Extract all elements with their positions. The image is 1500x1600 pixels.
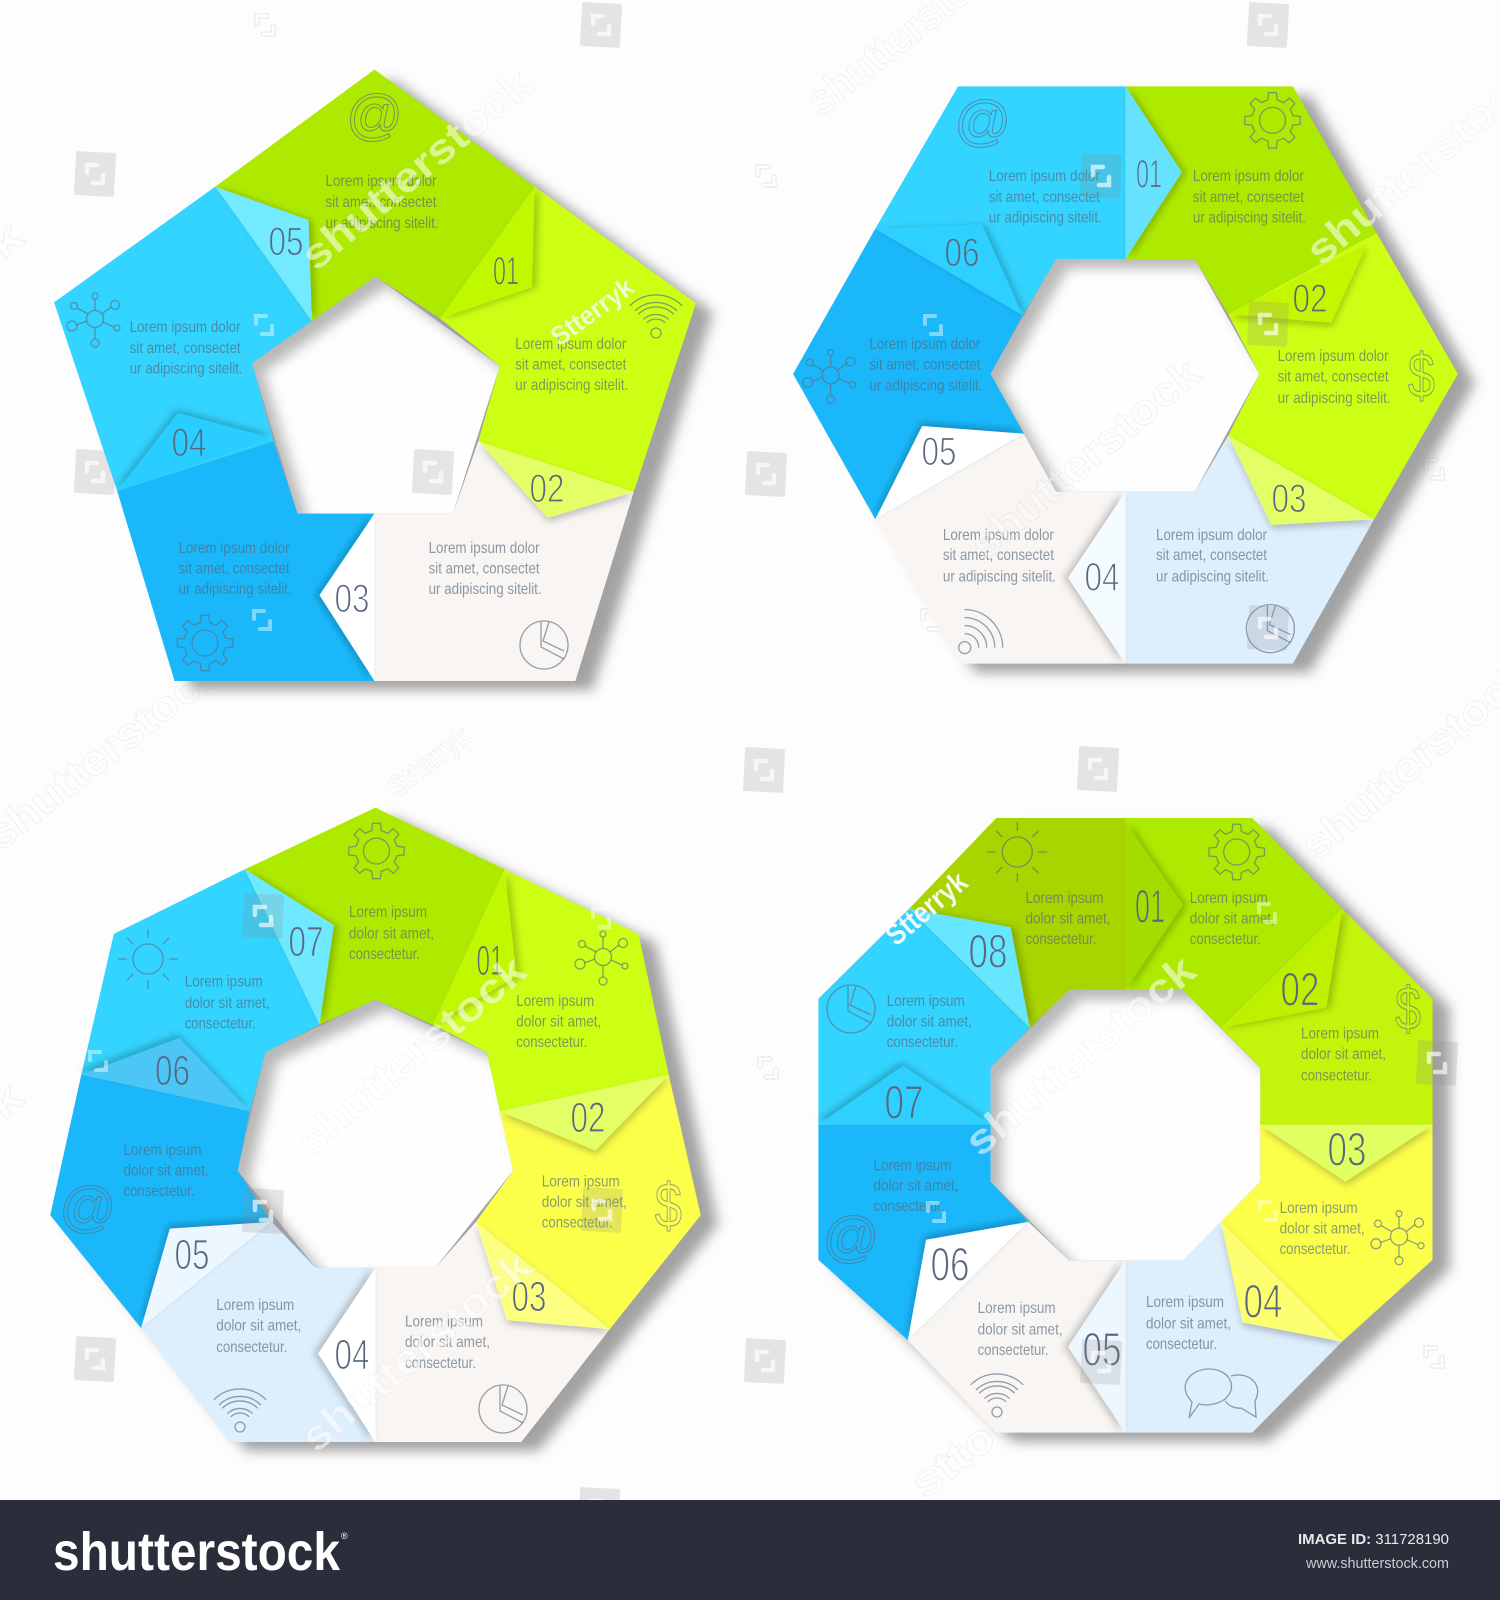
text: segment 06: consectetur. <box>874 1198 944 1215</box>
segment 04 <box>375 1222 610 1442</box>
watermarks on heptagon: shutterstock <box>287 945 536 1165</box>
icon: pie chart <box>520 621 568 669</box>
icon: hub <box>803 350 856 404</box>
numbers: 05 <box>1082 1322 1122 1376</box>
hole inner shadow <box>990 990 1260 1260</box>
numbers: 02 <box>530 467 564 511</box>
fold 03 <box>320 514 375 681</box>
segment 01 <box>1125 818 1342 1028</box>
fold 07 <box>245 869 334 1025</box>
numbers: 06 <box>930 1238 970 1290</box>
text: segment 05: consectetur. <box>978 1342 1049 1359</box>
numbers: 01 <box>1136 152 1162 196</box>
icon: rss <box>959 610 1003 654</box>
numbers: 03 <box>512 1273 546 1321</box>
text: segment 01: consectetur. <box>349 946 420 963</box>
fold 01 <box>433 872 517 1025</box>
text: segment 07 <box>887 993 972 1051</box>
text: segment 01 <box>1190 890 1275 948</box>
icon: gear <box>177 615 233 671</box>
text: segment 05: dolor sit amet, <box>216 1318 301 1334</box>
chart: pentagon with five segments <box>54 70 719 698</box>
text: segment 01: ur adipiscing sitelit. <box>326 215 438 232</box>
fold 03 <box>1228 436 1374 525</box>
registered mark: ® <box>341 1531 348 1541</box>
text: segment 04: sit amet, consectet <box>179 560 290 578</box>
segment 05 <box>54 187 312 491</box>
hole inner shadow <box>990 259 1259 492</box>
hexagon geometry <box>793 86 1458 664</box>
icon: gear <box>1245 93 1300 148</box>
text: segment 08: consectetur. <box>1026 931 1096 948</box>
text: segment 04: Lorem ipsum dolor <box>943 527 1054 544</box>
icon: dollar: $ <box>1408 342 1435 411</box>
text: segment 01: ur adipiscing sitelit. <box>1193 210 1306 226</box>
fold 03 <box>1260 1125 1433 1182</box>
icon: at sign: @ <box>59 1175 116 1238</box>
fold 02 <box>1221 909 1342 1028</box>
text: segment 06: ur adipiscing sitelit. <box>989 210 1102 226</box>
icon: pie chart <box>479 1385 527 1433</box>
segment 05 <box>793 229 1024 519</box>
segment 07 <box>81 869 320 1111</box>
octagon drop shadow <box>835 827 1450 1442</box>
text: segment 02 <box>1301 1026 1386 1084</box>
segment 06 <box>50 1075 272 1328</box>
text: segment 02 <box>1278 348 1391 407</box>
numbers: 08 <box>968 924 1008 978</box>
fold 01 <box>1125 86 1182 259</box>
fold 03 <box>476 1222 610 1329</box>
segment 05 <box>908 1222 1125 1433</box>
text: segment 01: Lorem ipsum <box>349 904 427 921</box>
segment 03 <box>476 1075 701 1329</box>
text: segment 01 <box>326 173 438 232</box>
fold 01 <box>1125 822 1183 990</box>
text: segment 02: Lorem ipsum <box>1301 1026 1379 1042</box>
numbers: 03 <box>334 577 370 621</box>
text: segment 04: Lorem ipsum <box>405 1314 483 1330</box>
numbers: 04 <box>334 1331 370 1379</box>
icon: hub <box>1371 1211 1424 1265</box>
footer band <box>0 1500 1500 1600</box>
text: segment 03: consectetur. <box>1280 1241 1351 1258</box>
text: segment 04: dolor sit amet, <box>405 1334 490 1351</box>
text: segment 03: Lorem ipsum dolor <box>1156 527 1268 544</box>
text: segment 03 <box>1156 527 1269 586</box>
text: segment 03: sit amet, consectet <box>429 560 540 578</box>
watermarks on hexagon: shutterstock <box>961 348 1210 568</box>
pentagon geometry <box>54 70 696 681</box>
segment 03 <box>1221 1125 1433 1342</box>
text: segment 06: sit amet, consectet <box>989 189 1100 206</box>
watermarks on pentagon: Stterryk <box>545 271 640 352</box>
text: segment 02: sit amet, consectet <box>1278 368 1389 386</box>
image id: IMAGE ID: 311728190 <box>1298 1531 1449 1548</box>
text: segment 03 <box>429 540 542 598</box>
segment 02 <box>440 187 696 492</box>
hole inner shadow <box>238 1000 490 1268</box>
segment 03 <box>1125 436 1374 664</box>
text: segment 05 <box>130 319 243 378</box>
text: segment 06: consectetur. <box>124 1183 194 1200</box>
segment 02 <box>1228 233 1458 519</box>
icon: at sign: @ <box>823 1205 879 1268</box>
fold 02 <box>478 441 634 518</box>
background watermarks: sttock <box>902 1377 1049 1507</box>
hexagon drop shadow <box>810 95 1475 673</box>
chart: octagon with eight segments <box>818 818 1458 1450</box>
text: segment 05: Lorem ipsum dolor <box>869 336 981 353</box>
segment 05 <box>141 1222 375 1442</box>
text: segment 02: sit amet, consectet <box>515 356 627 374</box>
fold 05 <box>875 426 1024 519</box>
icon: wifi <box>214 1389 266 1432</box>
text: segment 05 <box>978 1300 1063 1359</box>
numbers: 06 <box>155 1047 190 1095</box>
text: segment 05: ur adipiscing sitelit. <box>130 360 243 378</box>
text: segment 03: sit amet, consectet <box>1156 547 1267 564</box>
icon: gear <box>1209 824 1264 880</box>
numbers: 02 <box>1280 962 1320 1016</box>
text: segment 02 <box>516 993 601 1051</box>
text: segment 03: consectetur. <box>542 1214 613 1232</box>
text: segment 02: Lorem ipsum dolor <box>1278 348 1389 365</box>
chart: hexagon with six segments <box>793 86 1500 680</box>
text: segment 01: dolor sit amet, <box>349 926 434 942</box>
text: segment 04 <box>179 540 292 598</box>
text: segment 06: Lorem ipsum dolor <box>989 168 1100 185</box>
text: segment 07: consectetur. <box>185 1016 256 1032</box>
segment 02 <box>1221 909 1433 1125</box>
fold 04 <box>117 413 272 491</box>
text: segment 03: Lorem ipsum <box>1280 1200 1358 1217</box>
numbers: 02 <box>570 1094 606 1142</box>
numbers: 01 <box>1135 880 1165 932</box>
text: segment 02: Lorem ipsum dolor <box>515 336 627 353</box>
heptagon drop shadow <box>67 817 718 1451</box>
text: segment 04: consectetur. <box>1146 1336 1217 1353</box>
fold 05 <box>141 1222 272 1328</box>
text: segment 03 <box>542 1174 627 1232</box>
fold 04 <box>1221 1222 1342 1342</box>
numbers: 07 <box>884 1076 924 1128</box>
site url: www.shutterstock.com <box>1305 1555 1449 1572</box>
numbers: 01 <box>493 250 519 294</box>
segment 02 <box>433 869 669 1111</box>
text: segment 01 <box>1193 168 1306 226</box>
text: segment 01: dolor sit amet, <box>1190 910 1275 928</box>
numbers: 03 <box>1272 477 1306 521</box>
fold 06 <box>875 224 1023 315</box>
text: segment 02: ur adipiscing sitelit. <box>515 377 628 394</box>
text: segment 02 <box>515 336 628 394</box>
text: segment 07: consectetur. <box>887 1034 958 1051</box>
watermarks on octagon <box>879 865 1458 1385</box>
text: segment 02: consectetur. <box>516 1034 587 1051</box>
segment 08 <box>909 818 1125 1028</box>
text: segment 04: Lorem ipsum <box>1146 1294 1224 1311</box>
fold 08 <box>909 909 1030 1028</box>
text: segment 03: dolor sit amet, <box>542 1194 627 1211</box>
text: segment 07: Lorem ipsum <box>185 974 263 990</box>
text: segment 05: sit amet, consectet <box>869 356 981 374</box>
center hole <box>991 259 1259 492</box>
watermarks on pentagon <box>254 59 640 629</box>
segment 04 <box>875 434 1125 664</box>
text: segment 04 <box>405 1314 490 1372</box>
text: segment 08: dolor sit amet, <box>1026 910 1110 928</box>
icon: hub <box>67 293 120 347</box>
text: segment 06 <box>124 1142 208 1200</box>
icon: sun <box>987 822 1047 882</box>
text: segment 06 <box>989 168 1102 226</box>
icon: pie chart <box>827 985 875 1033</box>
text: segment 03 <box>1280 1200 1365 1258</box>
segment 04 <box>1125 1222 1342 1433</box>
numbers: 05 <box>268 220 304 264</box>
numbers <box>922 152 1328 600</box>
text: segment 06: Lorem ipsum <box>874 1158 952 1174</box>
text: segment 07: dolor sit amet, <box>887 1014 972 1030</box>
segment 06 <box>818 1125 1028 1340</box>
text: segment 05: Lorem ipsum <box>978 1300 1056 1317</box>
text: segment 02: dolor sit amet, <box>1301 1046 1386 1063</box>
text: segment 01: Lorem ipsum <box>1190 890 1268 907</box>
fold 04 <box>318 1268 375 1442</box>
watermarks on pentagon: shutterstock <box>292 59 541 279</box>
numbers <box>172 220 564 621</box>
text: segment 01: sit amet, consectet <box>1193 189 1304 206</box>
watermarks on hexagon <box>925 54 1500 651</box>
center hole <box>991 990 1260 1261</box>
numbers <box>155 918 606 1379</box>
text: segment 05: sit amet, consectet <box>130 340 241 357</box>
text: segment 03: ur adipiscing sitelit. <box>429 581 542 598</box>
segment 01 <box>215 69 535 321</box>
icon: hub <box>575 931 628 985</box>
text: segment 04: sit amet, consectet <box>943 547 1054 564</box>
icon: gear <box>349 823 404 879</box>
text: segment 06: Lorem ipsum <box>124 1142 202 1159</box>
text: segment 07: dolor sit amet, <box>185 995 270 1012</box>
segment 01 <box>245 808 505 1025</box>
icon: dollar: $ <box>1395 975 1421 1042</box>
text: segment 05 <box>869 336 982 394</box>
center hole <box>238 1000 513 1268</box>
chart: heptagon with seven segments <box>50 808 724 1458</box>
watermarks on heptagon: shutterstock <box>292 1241 541 1461</box>
center hole <box>252 276 500 514</box>
fold 01 <box>440 187 535 318</box>
fold 05 <box>215 187 312 321</box>
segment 01 <box>1125 86 1377 314</box>
text: segment 04: Lorem ipsum dolor <box>179 540 290 557</box>
footer logo: shutterstock <box>53 1522 341 1582</box>
text: segment 04: consectetur. <box>405 1355 476 1372</box>
text: segment 07: Lorem ipsum <box>887 993 965 1010</box>
icon: at sign: @ <box>954 89 1011 152</box>
icon: wifi <box>971 1374 1023 1417</box>
numbers: 04 <box>1084 556 1120 600</box>
text: segment 05: dolor sit amet, <box>978 1322 1063 1338</box>
text: segment 06: dolor sit amet, <box>874 1178 958 1194</box>
numbers: 06 <box>944 231 980 275</box>
icon: pie chart <box>1246 605 1294 653</box>
fold 06 <box>81 1038 250 1111</box>
segment 06 <box>875 86 1125 315</box>
text: segment 05: Lorem ipsum dolor <box>130 319 241 336</box>
icon: sun <box>118 929 178 989</box>
numbers: 04 <box>172 421 206 465</box>
numbers: 05 <box>922 430 956 474</box>
text: segment 04: dolor sit amet, <box>1146 1316 1231 1332</box>
numbers: 02 <box>1292 277 1328 321</box>
text: segment 02: consectetur. <box>1301 1068 1372 1084</box>
fold 05 <box>1068 1261 1125 1433</box>
icon: chat bubbles <box>1185 1369 1258 1418</box>
fold 07 <box>818 1066 991 1125</box>
fold 06 <box>908 1222 1028 1340</box>
text: segment 04: ur adipiscing sitelit. <box>179 581 292 598</box>
text: segment 03: Lorem ipsum dolor <box>429 540 540 557</box>
numbers: 04 <box>1244 1274 1282 1328</box>
text: segment 08: Lorem ipsum <box>1026 890 1104 907</box>
numbers: 03 <box>1328 1122 1366 1176</box>
text: segment 05: Lorem ipsum <box>216 1297 294 1314</box>
numbers <box>884 880 1366 1376</box>
text: segment 04: ur adipiscing sitelit. <box>943 568 1056 586</box>
text: segment 03: ur adipiscing sitelit. <box>1156 568 1269 586</box>
text: segment 08 <box>1026 890 1110 948</box>
watermarks on heptagon <box>90 893 623 1461</box>
text: segment 03: dolor sit amet, <box>1280 1220 1365 1238</box>
text: segment 02: dolor sit amet, <box>516 1014 601 1030</box>
icon: wifi <box>630 295 682 338</box>
numbers: 07 <box>288 918 324 966</box>
fold 02 <box>500 1075 669 1151</box>
hole inner shadow <box>252 276 500 514</box>
fold 04 <box>1068 492 1125 664</box>
text: segment 06 <box>874 1158 958 1215</box>
segment 04 <box>117 441 375 681</box>
text: segment 07 <box>185 974 270 1032</box>
segment 07 <box>818 909 1030 1125</box>
text: segment 03: Lorem ipsum <box>542 1174 620 1190</box>
text: segment 05 <box>216 1297 301 1356</box>
octagon geometry <box>818 818 1433 1433</box>
text: segment 01 <box>349 904 434 963</box>
text: segment 04 <box>943 527 1056 586</box>
text: segment 02: ur adipiscing sitelit. <box>1278 390 1391 407</box>
watermarks on octagon: Stterryk <box>879 865 974 952</box>
text: segment 05: consectetur. <box>216 1339 287 1356</box>
watermarks on octagon: shutterstock <box>956 945 1205 1165</box>
text: segment 06: dolor sit amet, <box>124 1162 208 1180</box>
pentagon drop shadow <box>71 78 713 690</box>
text: segment 01: Lorem ipsum dolor <box>1193 168 1304 185</box>
text: segment 02: Lorem ipsum <box>516 993 594 1010</box>
fold 02 <box>1228 244 1367 323</box>
heptagon geometry <box>50 808 701 1442</box>
numbers: 01 <box>476 937 504 985</box>
text: segment 01: consectetur. <box>1190 931 1261 948</box>
background watermarks: Stterryk <box>382 719 477 804</box>
icon: at sign: @ <box>346 83 403 146</box>
numbers: 05 <box>174 1231 210 1279</box>
icon: dollar: $ <box>655 1172 682 1241</box>
text: segment 04 <box>1146 1294 1231 1353</box>
segment 03 <box>375 441 634 681</box>
text: segment 01: Lorem ipsum dolor <box>326 173 437 190</box>
text: segment 01: sit amet, consectet <box>326 194 437 211</box>
text: segment 05: ur adipiscing sitelit. <box>869 378 982 394</box>
